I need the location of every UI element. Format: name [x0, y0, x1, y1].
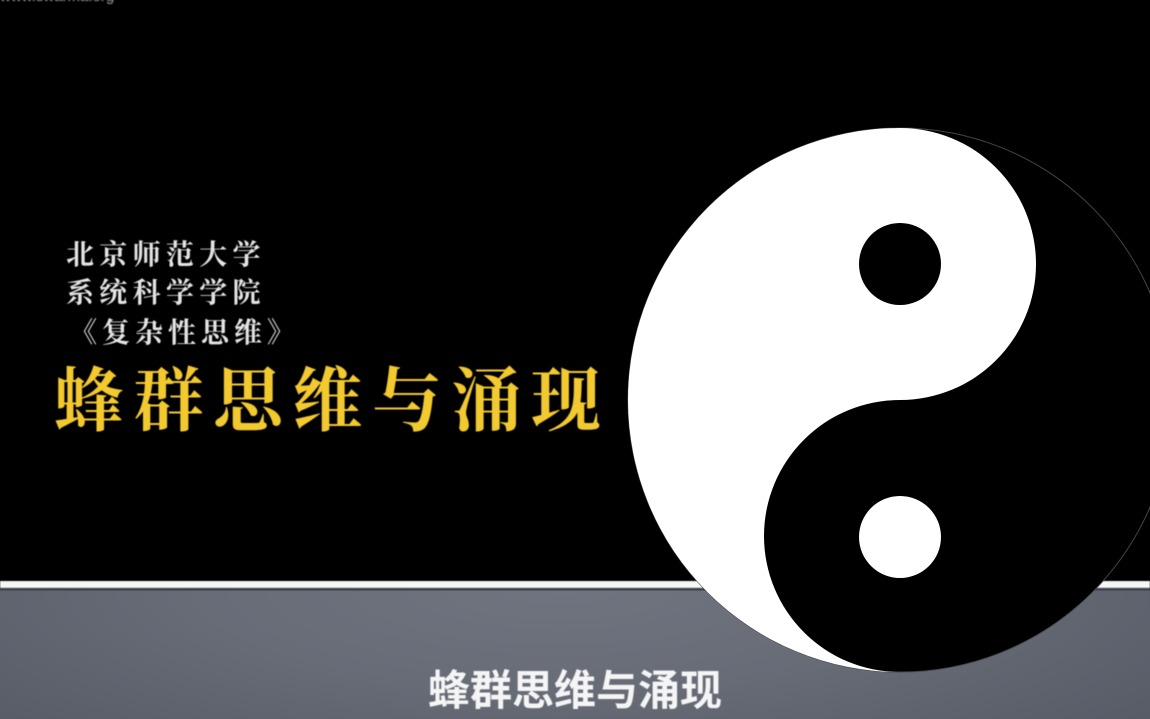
subtitle caption: 蜂群思维与涌现 — [428, 667, 722, 714]
main gold title: 蜂群思维与涌现 — [54, 364, 610, 441]
black disc with faint outer rim — [628, 128, 1150, 672]
institution text — [66, 239, 300, 349]
bottom gray band — [0, 588, 1150, 719]
course name: 《复杂性思维》 — [69, 318, 300, 349]
white divider line — [0, 581, 1150, 588]
school name: 系统科学学院 — [66, 278, 266, 309]
white eye — [859, 496, 941, 578]
black eye — [859, 223, 941, 305]
university name: 北京师范大学 — [66, 240, 266, 271]
white half — [628, 128, 1036, 672]
